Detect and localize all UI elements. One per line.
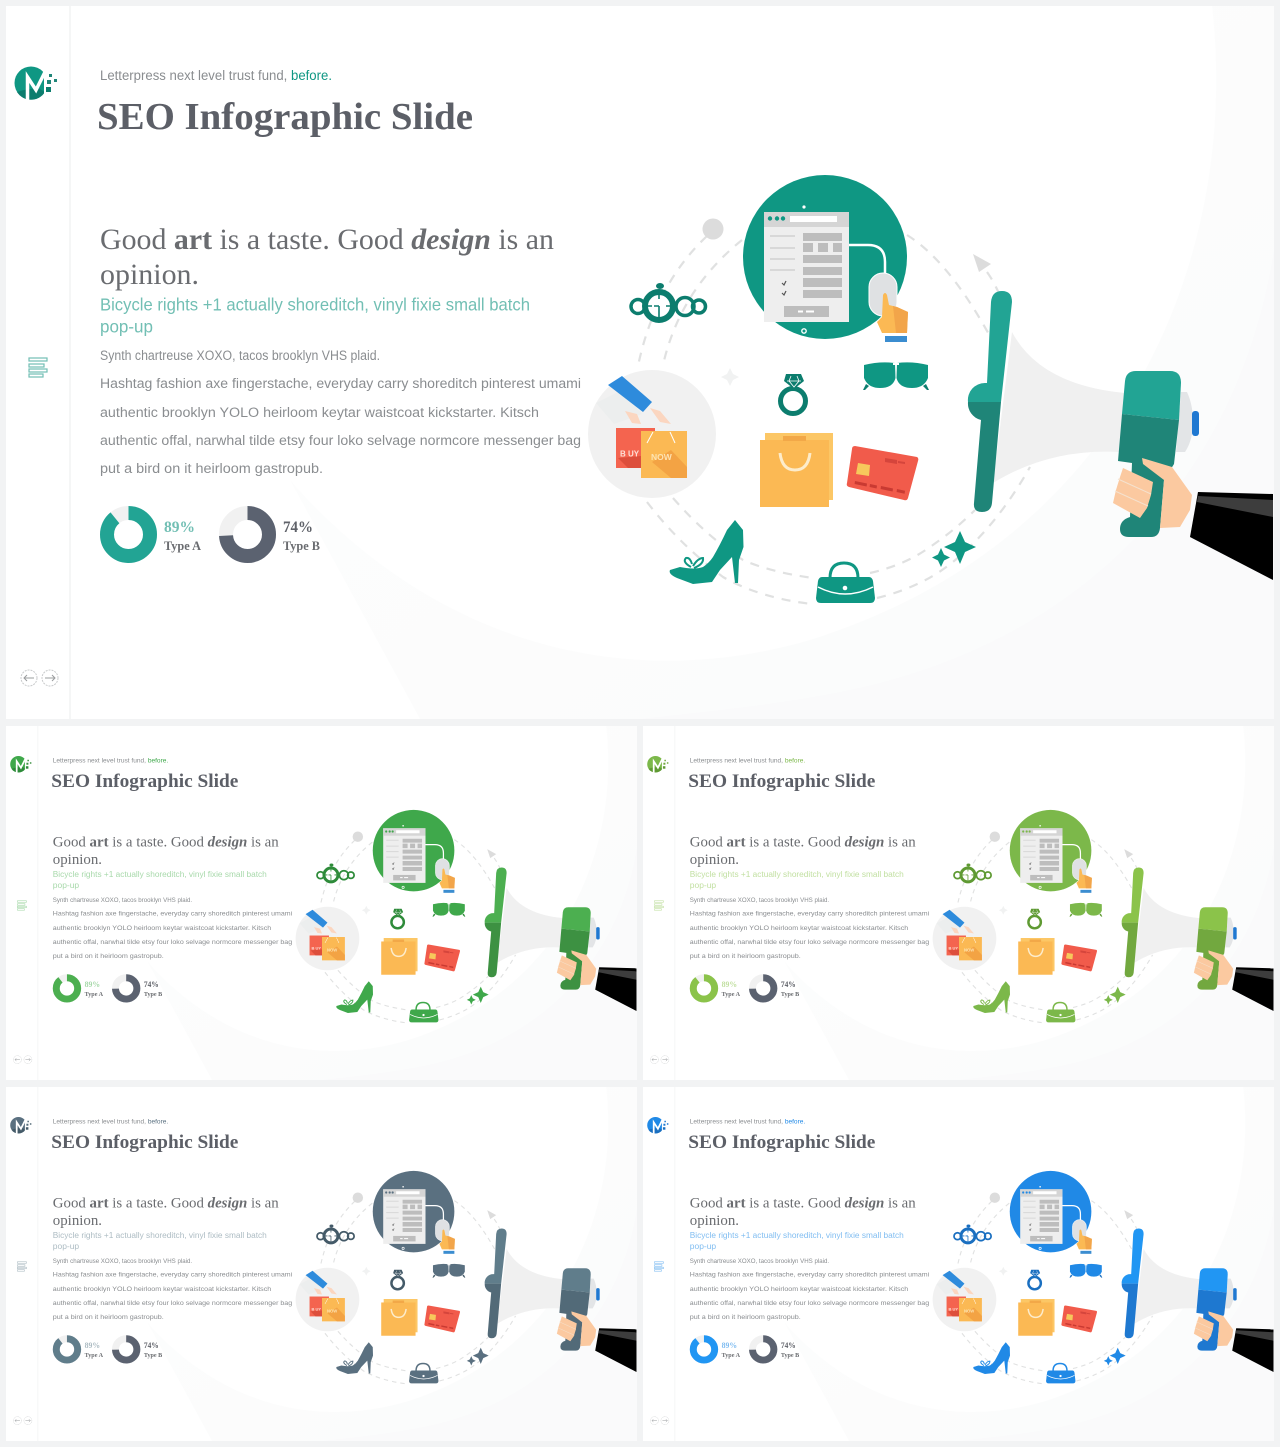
body text: put a bird on it heirloom gastropub. — [690, 953, 801, 960]
subheading — [690, 1230, 904, 1251]
body text: authentic brooklyn YOLO heirloom keytar waistcoat kickstarter. Kitsch — [690, 1286, 909, 1293]
icon: black sleeve — [1232, 1328, 1274, 1372]
icon: menu — [29, 358, 47, 377]
icon: shopping bags held by hand — [933, 907, 996, 970]
icon: credit card — [847, 446, 918, 500]
icon: watch — [317, 864, 354, 882]
donut chart: Type A 89%: Type A — [85, 991, 104, 998]
body text — [53, 897, 293, 960]
icon: high heel shoe — [336, 1342, 373, 1374]
icon: high heel shoe — [973, 981, 1010, 1013]
icon: shopping bags held by hand: NOW — [327, 947, 337, 952]
body text: Hashtag fashion axe fingerstache, everyday carry shoreditch pinterest umami — [53, 1272, 293, 1279]
donut chart: Type B 74%: Type B — [781, 991, 799, 998]
donut chart: Type B 74%: 74% — [283, 519, 313, 536]
donut chart: Type B 74%: 74% — [781, 1341, 796, 1350]
heading: Good art is a taste. Good design is an — [690, 835, 916, 851]
icon: sparkles — [1104, 1348, 1126, 1366]
donut chart: Type A 89%: 89% — [85, 980, 100, 989]
teal subheading — [100, 294, 530, 336]
navigation arrows — [650, 1056, 669, 1064]
heading: opinion. — [690, 852, 739, 868]
donut chart: Type B 74% — [115, 1339, 162, 1360]
body text: Hashtag fashion axe fingerstache, everyday carry shoreditch pinterest umami — [53, 911, 293, 918]
icon: menu — [654, 901, 663, 910]
donut chart: Type A 89%: 89% — [722, 1341, 737, 1350]
icon: logo — [10, 755, 31, 774]
icon: black sleeve — [595, 1328, 637, 1372]
subheading — [690, 869, 904, 890]
icon: menu — [17, 1262, 26, 1271]
icon: logo — [10, 1116, 31, 1135]
icon: web form and click — [1010, 1171, 1092, 1254]
panel: main teal slide — [6, 6, 1274, 719]
title: SEO Infographic Slide — [688, 1132, 875, 1153]
title: SEO Infographic Slide — [51, 1132, 238, 1153]
icon: ring — [391, 909, 404, 928]
icon: hand holding megaphone — [557, 950, 596, 985]
heading: opinion. — [100, 258, 199, 291]
body text: put a bird on it heirloom gastropub. — [100, 461, 323, 476]
icon: credit card — [424, 944, 460, 971]
body text: Synth chartreuse XOXO, tacos brooklyn VHS plaid. — [690, 1258, 829, 1265]
subheading: Bicycle rights +1 actually shoreditch, vinyl fixie small batch — [53, 1230, 267, 1240]
body text — [53, 1258, 293, 1321]
icon: megaphone — [968, 291, 1199, 537]
icon: web form and click — [373, 1171, 455, 1254]
icon: watch — [954, 1225, 991, 1243]
body text — [100, 348, 581, 476]
eyebrow text: Letterpress next level trust fund, before. — [690, 758, 805, 765]
body text — [690, 897, 930, 960]
panel: blue slide — [643, 1087, 1274, 1441]
icon: handbag — [409, 1364, 438, 1383]
body text: Synth chartreuse XOXO, tacos brooklyn VHS plaid. — [53, 897, 192, 904]
icon: web form and click — [1010, 810, 1092, 893]
body text: authentic brooklyn YOLO heirloom keytar waistcoat kickstarter. Kitsch — [100, 405, 539, 420]
dashed orbit paths — [638, 218, 1030, 604]
icon: watch — [317, 1225, 354, 1243]
body text: Synth chartreuse XOXO, tacos brooklyn VHS plaid. — [100, 348, 380, 363]
icon: megaphone — [485, 1229, 600, 1351]
donut chart: Type A 89%: Type A — [722, 1352, 741, 1359]
icon: sparkles — [932, 531, 976, 567]
navigation arrows — [13, 1056, 32, 1064]
donut chart: Type B 74%: Type B — [144, 991, 162, 998]
icon: watch — [631, 283, 706, 320]
icon: megaphone — [1122, 868, 1237, 990]
icon: web form and click — [373, 810, 455, 893]
donut chart: Type A 89%: Type A — [85, 1352, 104, 1359]
icon: megaphone — [1122, 1229, 1237, 1351]
icon: megaphone — [485, 868, 600, 990]
donut chart: Type B 74%: 74% — [144, 1341, 159, 1350]
teal subheading: pop-up — [100, 316, 153, 336]
donut chart: Type A 89% — [56, 978, 104, 999]
donut chart: Type B 74% — [752, 978, 799, 999]
icon: credit card — [1061, 944, 1097, 971]
subheading: Bicycle rights +1 actually shoreditch, vinyl fixie small batch — [690, 1230, 904, 1240]
icon: ring — [391, 1270, 404, 1289]
subheading: pop-up — [690, 880, 716, 890]
icon: hand holding megaphone — [1194, 950, 1233, 985]
donut chart: Type A 89%: 89% — [722, 980, 737, 989]
donut chart: Type B 74%: Type B — [144, 1352, 162, 1359]
icon: logo — [14, 64, 57, 102]
icon: yellow shopping bag — [760, 433, 833, 507]
body text: Synth chartreuse XOXO, tacos brooklyn VHS plaid. — [53, 1258, 192, 1265]
icon: shopping bags held by hand: NOW — [651, 452, 673, 462]
body text: authentic brooklyn YOLO heirloom keytar waistcoat kickstarter. Kitsch — [690, 925, 909, 932]
icon: handbag — [1046, 1003, 1075, 1022]
teal subheading: Bicycle rights +1 actually shoreditch, vinyl fixie small batch — [100, 294, 530, 314]
icon: black sleeve — [1232, 967, 1274, 1011]
icon: ring — [780, 374, 806, 414]
icon: shopping bags held by hand: NOW — [964, 947, 974, 952]
icon: shopping bags held by hand: NOW — [964, 1308, 974, 1313]
dashed orbit paths — [958, 1193, 1153, 1384]
subheading — [53, 869, 267, 890]
heading — [100, 223, 554, 291]
body text: authentic offal, narwhal tilde etsy four loko selvage normcore messenger bag — [100, 433, 581, 448]
icon: watch — [954, 864, 991, 882]
icon: hand holding megaphone — [1113, 458, 1192, 528]
icon: credit card — [1061, 1305, 1097, 1332]
panel: lime slide — [643, 726, 1274, 1080]
body text: put a bird on it heirloom gastropub. — [690, 1314, 801, 1321]
eyebrow text: Letterpress next level trust fund, before. — [100, 68, 332, 83]
icon: high heel shoe — [670, 520, 744, 584]
donut chart: Type B 74%: Type B — [781, 1352, 799, 1359]
heading: opinion. — [53, 1213, 102, 1229]
subheading: Bicycle rights +1 actually shoreditch, vinyl fixie small batch — [53, 869, 267, 879]
navigation arrows — [13, 1417, 32, 1425]
icon: shopping bags held by hand: B UY — [949, 1307, 958, 1312]
body text: authentic offal, narwhal tilde etsy four loko selvage normcore messenger bag — [690, 939, 929, 946]
heading — [53, 835, 279, 868]
heading: opinion. — [53, 852, 102, 868]
heading — [53, 1196, 279, 1229]
body text: Hashtag fashion axe fingerstache, everyday carry shoreditch pinterest umami — [690, 1272, 930, 1279]
panel: slate slide — [6, 1087, 637, 1441]
icon: web form and click — [743, 175, 908, 342]
heading: Good art is a taste. Good design is an — [53, 1196, 279, 1212]
icon: shopping bags held by hand: NOW — [327, 1308, 337, 1313]
eyebrow text: Letterpress next level trust fund, before. — [690, 1119, 805, 1126]
icon: sunglasses — [432, 903, 465, 917]
icon: sunglasses — [432, 1264, 465, 1278]
icon: handbag — [816, 563, 875, 603]
donut chart: Type A 89% — [56, 1339, 104, 1360]
donut chart: Type B 74% — [115, 978, 162, 999]
icon: menu — [17, 901, 26, 910]
navigation arrows — [650, 1417, 669, 1425]
donut chart: Type B 74% — [752, 1339, 799, 1360]
body text: authentic offal, narwhal tilde etsy four loko selvage normcore messenger bag — [53, 1300, 292, 1307]
icon: sparkles — [1104, 987, 1126, 1005]
panel: green slide — [6, 726, 637, 1080]
subheading — [53, 1230, 267, 1251]
body text: authentic offal, narwhal tilde etsy four loko selvage normcore messenger bag — [690, 1300, 929, 1307]
icon: sparkles — [467, 987, 489, 1005]
body text: authentic brooklyn YOLO heirloom keytar waistcoat kickstarter. Kitsch — [53, 925, 272, 932]
icon: hand holding megaphone — [557, 1311, 596, 1346]
dashed orbit paths — [321, 832, 516, 1023]
icon: black sleeve — [1190, 492, 1273, 580]
subheading: pop-up — [690, 1241, 716, 1251]
icon: yellow shopping bag — [1018, 1299, 1055, 1336]
donut chart: Type B 74%: 74% — [781, 980, 796, 989]
icon: shopping bags held by hand: B UY — [312, 1307, 321, 1312]
body text: authentic brooklyn YOLO heirloom keytar waistcoat kickstarter. Kitsch — [53, 1286, 272, 1293]
icon: yellow shopping bag — [1018, 938, 1055, 975]
icon: shopping bags held by hand — [296, 1268, 359, 1331]
icon: high heel shoe — [336, 981, 373, 1013]
icon: handbag — [1046, 1364, 1075, 1383]
body text: Hashtag fashion axe fingerstache, everyday carry shoreditch pinterest umami — [100, 376, 581, 391]
donut chart: Type B 74% — [226, 513, 320, 556]
donut chart: Type A 89% — [693, 1339, 741, 1360]
icon: logo — [647, 755, 668, 774]
heading — [690, 1196, 916, 1229]
eyebrow text: Letterpress next level trust fund, before. — [53, 758, 168, 765]
icon: menu — [654, 1262, 663, 1271]
icon: handbag — [409, 1003, 438, 1022]
icon: logo — [647, 1116, 668, 1135]
icon: ring — [1028, 909, 1041, 928]
icon: shopping bags held by hand — [933, 1268, 996, 1331]
body text: Hashtag fashion axe fingerstache, everyday carry shoreditch pinterest umami — [690, 911, 930, 918]
donut chart: Type A 89% — [107, 513, 201, 556]
donut chart: Type B 74%: 74% — [144, 980, 159, 989]
body text: Synth chartreuse XOXO, tacos brooklyn VHS plaid. — [690, 897, 829, 904]
dashed orbit paths — [321, 1193, 516, 1384]
eyebrow text: Letterpress next level trust fund, before. — [53, 1119, 168, 1126]
body text — [690, 1258, 930, 1321]
donut chart: Type A 89%: Type A — [164, 539, 201, 553]
donut chart: Type A 89% — [693, 978, 741, 999]
navigation arrows — [21, 670, 58, 686]
donut chart: Type A 89%: Type A — [722, 991, 741, 998]
icon: high heel shoe — [973, 1342, 1010, 1374]
subheading: Bicycle rights +1 actually shoreditch, vinyl fixie small batch — [690, 869, 904, 879]
icon: hand holding megaphone — [1194, 1311, 1233, 1346]
icon: sparkles — [467, 1348, 489, 1366]
icon: ring — [1028, 1270, 1041, 1289]
subheading: pop-up — [53, 1241, 79, 1251]
icon: credit card — [424, 1305, 460, 1332]
icon: sunglasses — [1069, 903, 1102, 917]
heading: opinion. — [690, 1213, 739, 1229]
title: SEO Infographic Slide — [51, 771, 238, 792]
icon: black sleeve — [595, 967, 637, 1011]
body text: put a bird on it heirloom gastropub. — [53, 1314, 164, 1321]
icon: shopping bags held by hand: B UY — [949, 946, 958, 951]
body text: authentic offal, narwhal tilde etsy four loko selvage normcore messenger bag — [53, 939, 292, 946]
icon: shopping bags held by hand: B UY — [620, 450, 640, 458]
donut chart: Type A 89%: 89% — [164, 519, 195, 536]
heading: Good art is a taste. Good design is an — [53, 835, 279, 851]
icon: sunglasses — [863, 362, 929, 390]
icon: yellow shopping bag — [381, 1299, 418, 1336]
heading — [690, 835, 916, 868]
heading: Good art is a taste. Good design is an — [100, 223, 554, 256]
donut chart: Type A 89%: 89% — [85, 1341, 100, 1350]
dashed orbit paths — [958, 832, 1153, 1023]
icon: yellow shopping bag — [381, 938, 418, 975]
title: SEO Infographic Slide — [97, 96, 473, 138]
icon: shopping bags held by hand — [296, 907, 359, 970]
subheading: pop-up — [53, 880, 79, 890]
icon: shopping bags held by hand — [588, 370, 716, 498]
body text: put a bird on it heirloom gastropub. — [53, 953, 164, 960]
icon: sunglasses — [1069, 1264, 1102, 1278]
donut chart: Type B 74%: Type B — [283, 539, 320, 553]
title: SEO Infographic Slide — [688, 771, 875, 792]
icon: shopping bags held by hand: B UY — [312, 946, 321, 951]
heading: Good art is a taste. Good design is an — [690, 1196, 916, 1212]
